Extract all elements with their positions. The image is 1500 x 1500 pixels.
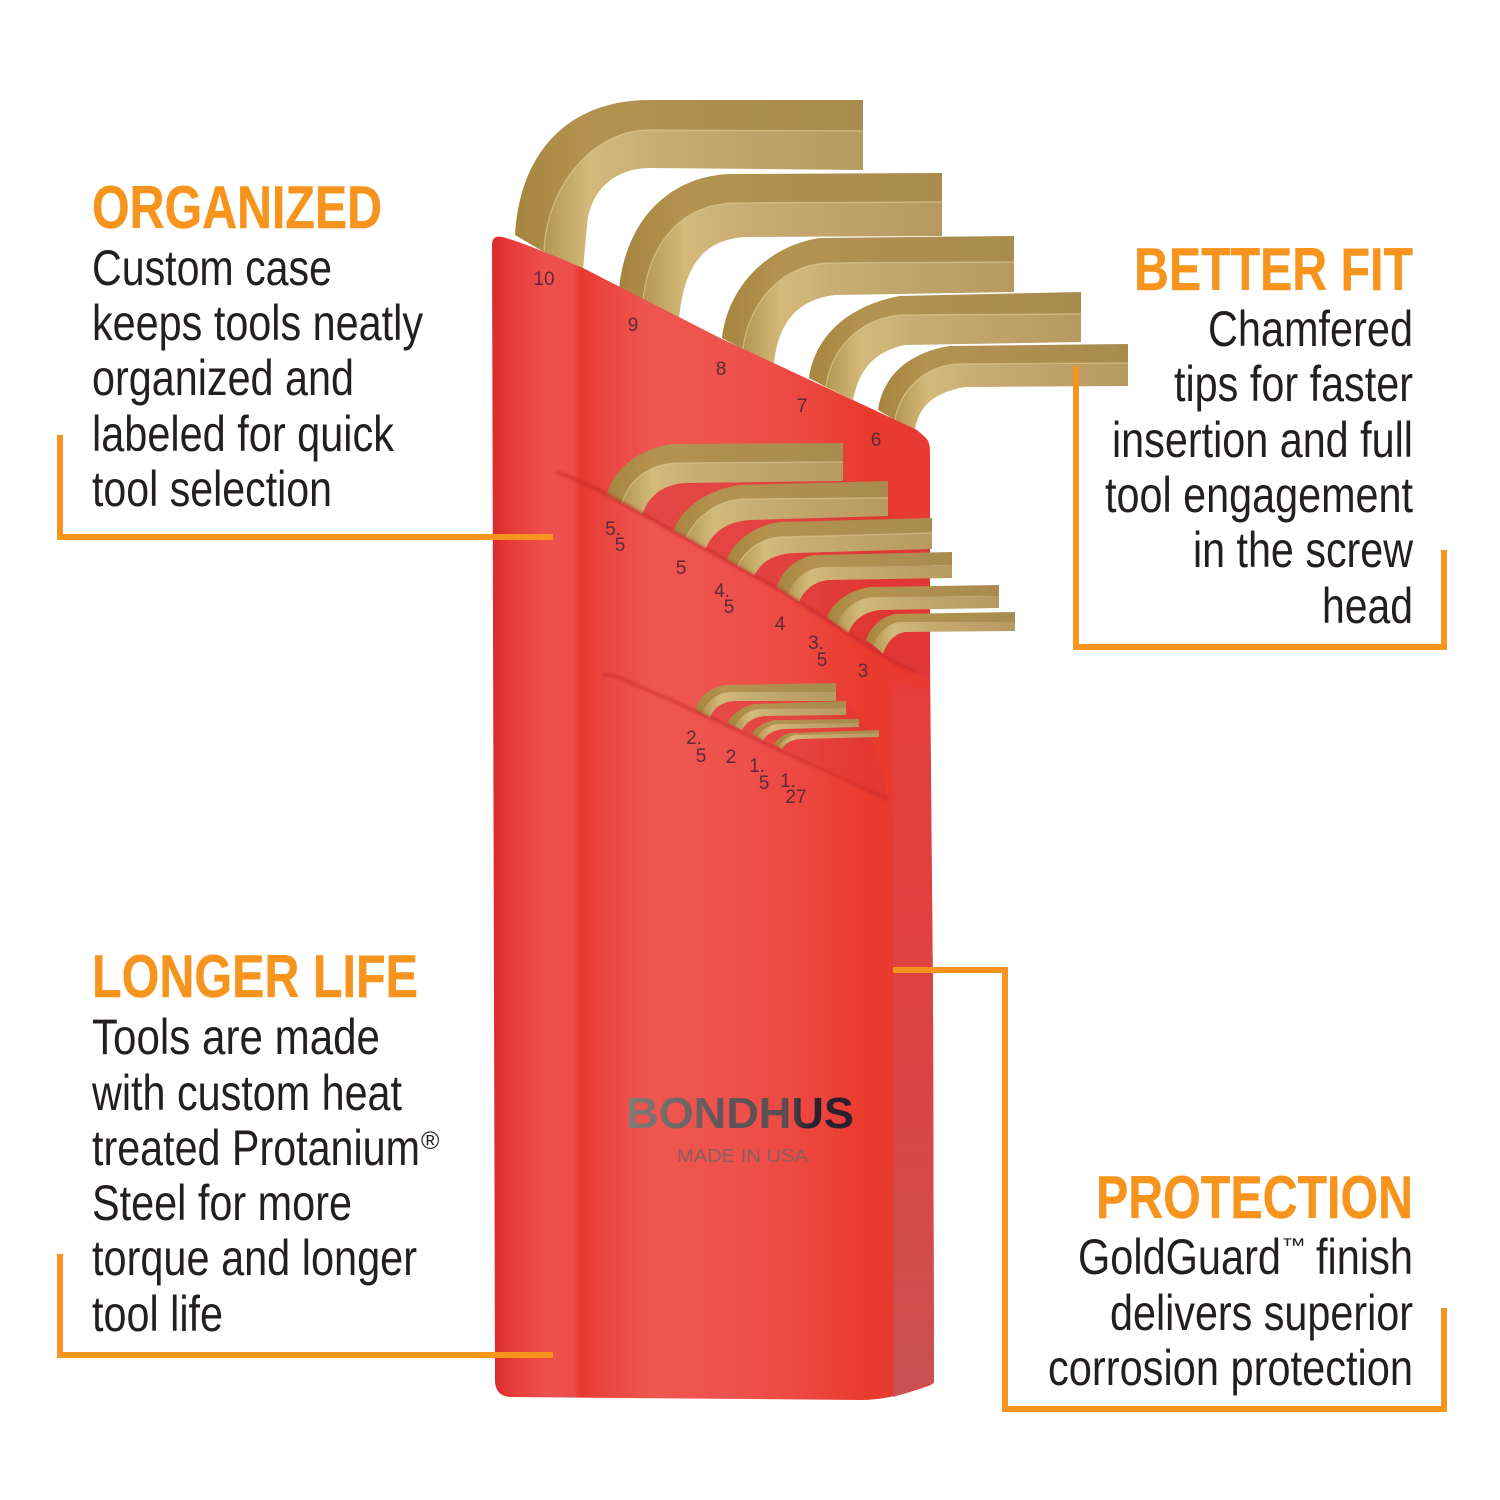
text: better fit description: tool engagement bbox=[1105, 467, 1413, 523]
text: better fit description: insertion and full bbox=[1112, 412, 1413, 468]
text: organized description: tool selection bbox=[92, 461, 332, 517]
text: organized description bbox=[92, 240, 423, 517]
size labels on case: 2. bbox=[686, 728, 702, 749]
text: longer life description: treated Protanium bbox=[92, 1120, 420, 1176]
text: protection description: ™ bbox=[1281, 1235, 1306, 1257]
lower pocket flap bbox=[603, 674, 888, 840]
size labels on case: 2 bbox=[726, 747, 736, 768]
pocket: lower row interior shadow bbox=[694, 692, 888, 797]
pocket: middle row interior shadow bbox=[612, 478, 930, 680]
text: longer life description: torque and longer bbox=[92, 1230, 417, 1286]
heading group: organized callout bbox=[92, 174, 423, 517]
size labels on case: 6 bbox=[871, 430, 881, 451]
size labels on case: 5 bbox=[676, 558, 686, 579]
text: protection description: delivers superior bbox=[1110, 1285, 1413, 1341]
text: protection description: GoldGuard bbox=[1078, 1229, 1281, 1285]
text: better fit description: in the screw bbox=[1193, 522, 1414, 578]
size labels on case: 5 bbox=[724, 597, 734, 618]
text: better fit description: Chamfered bbox=[1208, 301, 1413, 357]
size labels on case: 7 bbox=[797, 396, 807, 417]
lower row hex keys: sizes 2.5 to 1.27 bbox=[695, 683, 879, 749]
text: protection description: corrosion protection bbox=[1048, 1340, 1413, 1396]
text: better fit description bbox=[1105, 301, 1414, 634]
text: longer life description: Steel for more bbox=[92, 1175, 352, 1231]
text: longer life description: with custom heat bbox=[91, 1065, 402, 1121]
text: longer life description bbox=[91, 1009, 440, 1342]
heading group: better fit callout bbox=[1105, 236, 1414, 634]
text: organized description: Custom case bbox=[92, 240, 332, 296]
text: longer life description: Tools are made bbox=[92, 1009, 380, 1065]
size labels on case: 27 bbox=[785, 787, 807, 808]
heading: organized: ORGANIZED bbox=[92, 174, 382, 241]
leader line: better fit bbox=[1076, 366, 1444, 647]
size labels on case: 8 bbox=[716, 359, 726, 380]
heading: better fit: BETTER FIT bbox=[1134, 236, 1413, 303]
heading group: protection callout bbox=[1048, 1164, 1413, 1396]
middle row hex keys: sizes 5.5 to 3 bbox=[607, 443, 1015, 654]
text: protection description: finish bbox=[1316, 1229, 1413, 1285]
case logo: Bondhus bbox=[626, 1089, 854, 1166]
size labels on case: 5 bbox=[759, 773, 769, 794]
size labels on case: 10 bbox=[533, 269, 555, 290]
text: organized description: labeled for quick bbox=[92, 406, 395, 462]
leader line: organized bbox=[60, 435, 553, 537]
size labels on case: 1. bbox=[749, 756, 765, 777]
size labels on case: 5 bbox=[817, 650, 827, 671]
text: organized description: organized and bbox=[92, 350, 354, 406]
size labels on case: 5 bbox=[696, 746, 706, 767]
text: longer life description: ® bbox=[421, 1127, 440, 1155]
top row hex keys: sizes 10 to 6 bbox=[515, 100, 1128, 430]
case right side band bbox=[893, 680, 934, 1397]
size labels on case bbox=[533, 269, 881, 808]
case logo: Bondhus: MADE IN USA bbox=[677, 1146, 808, 1166]
text: longer life description: tool life bbox=[92, 1286, 223, 1342]
red plastic case bbox=[492, 237, 934, 1400]
size labels on case: 5. bbox=[605, 519, 621, 540]
size labels on case: 1. bbox=[780, 771, 796, 792]
size labels on case: 3. bbox=[808, 633, 824, 654]
size labels on case: 9 bbox=[628, 315, 638, 336]
text: protection description bbox=[1048, 1229, 1413, 1396]
case logo: Bondhus: BONDHUS bbox=[626, 1089, 854, 1138]
text: organized description: keeps tools neatly bbox=[92, 295, 423, 351]
leader line: protection bbox=[893, 970, 1444, 1409]
text: better fit description: head bbox=[1322, 578, 1413, 634]
heading group: longer life callout bbox=[91, 943, 440, 1342]
leader line: longer life bbox=[60, 1254, 553, 1355]
size labels on case: 5 bbox=[615, 535, 625, 556]
size labels on case: 4. bbox=[714, 581, 730, 602]
middle pocket flap bbox=[556, 472, 915, 800]
size labels on case: 3 bbox=[858, 661, 868, 682]
heading: longer life: LONGER LIFE bbox=[92, 943, 418, 1010]
size labels on case: 4 bbox=[775, 614, 786, 635]
heading: protection: PROTECTION bbox=[1096, 1164, 1413, 1231]
text: better fit description: tips for faster bbox=[1174, 356, 1413, 412]
